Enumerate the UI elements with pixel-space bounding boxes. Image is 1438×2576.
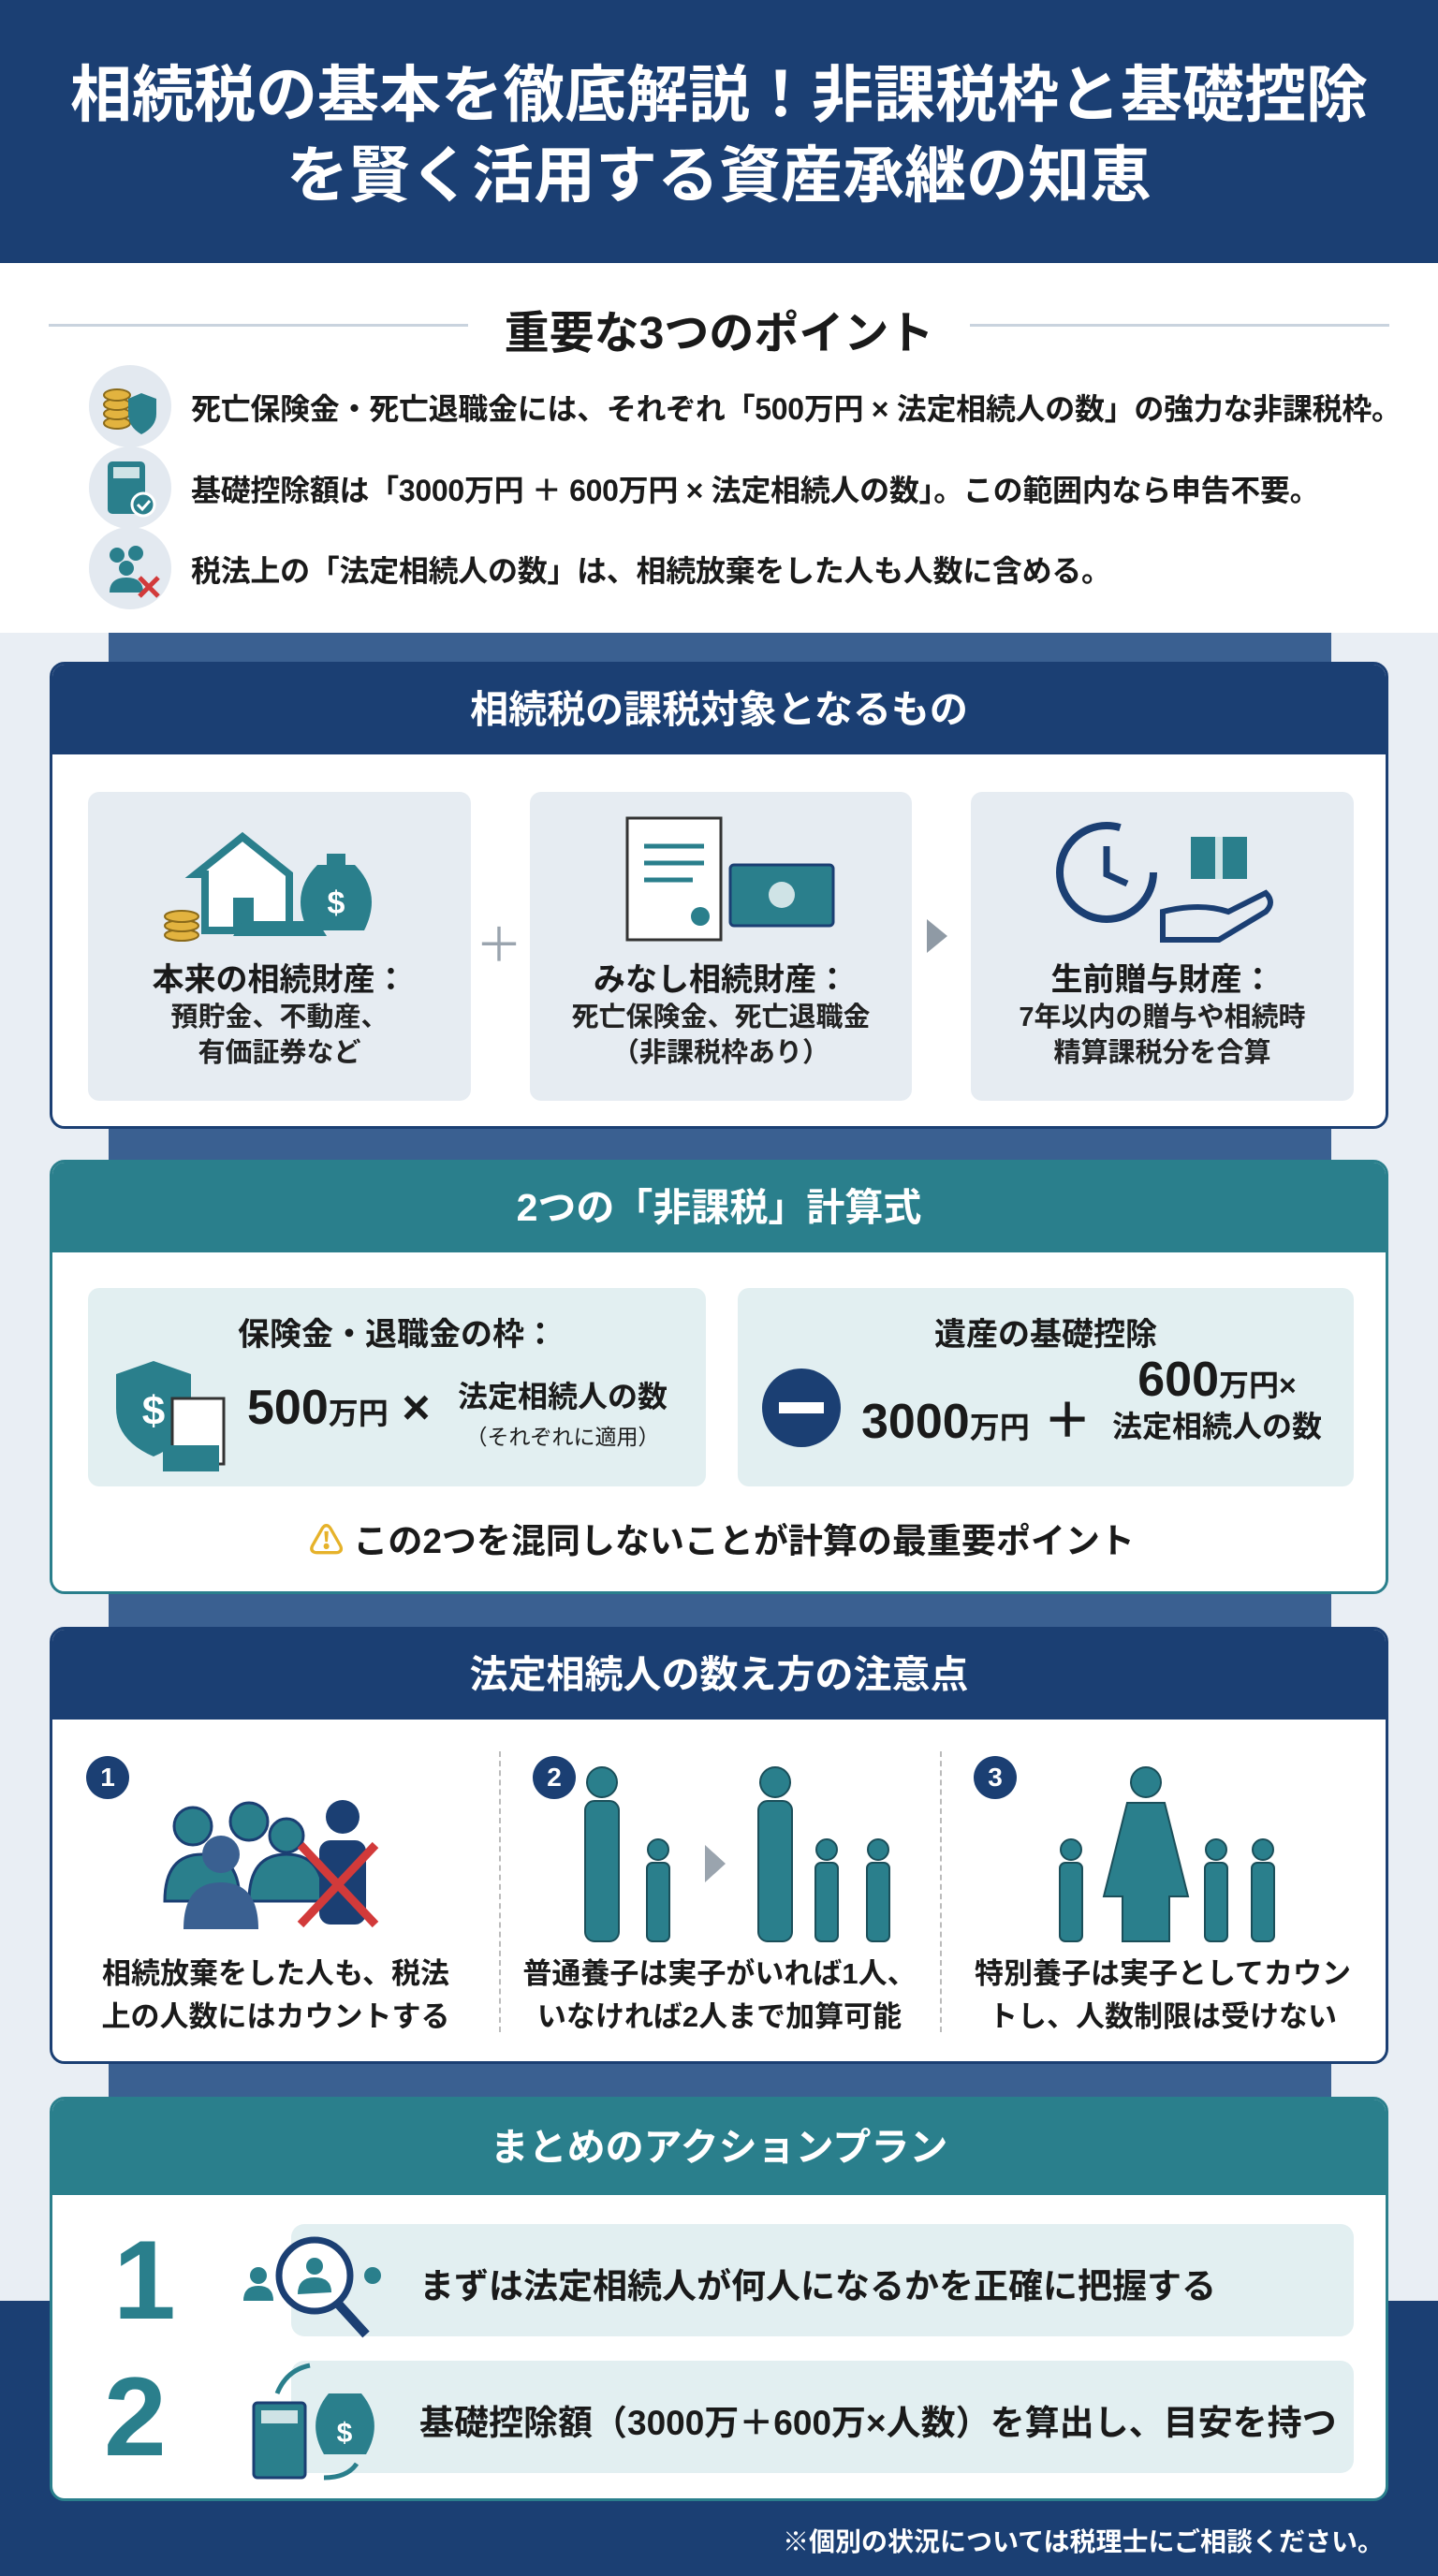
card: lifetime gifts: 7年以内の贈与や相続時	[1019, 1003, 1306, 1032]
icon: plus: ＋	[476, 919, 522, 972]
icon: minus	[762, 1368, 841, 1447]
heading	[52, 1163, 1386, 1252]
card: inherent assets: 預貯金、不動産、	[170, 1003, 388, 1032]
action 1	[113, 2217, 1354, 2343]
heading: 相続税の課税対象となるもの	[470, 688, 968, 731]
card: inherent assets: 有価証券など	[198, 1038, 361, 1068]
column 2: 2	[547, 1763, 562, 1792]
heading	[52, 2100, 1386, 2195]
bottom band	[0, 2301, 1438, 2576]
title: 相続税の基本を徹底解説！非課税枠と基礎控除	[70, 60, 1368, 129]
card: lifetime gifts	[971, 792, 1354, 1101]
card: deemed assets: みなし相続財産：	[594, 962, 848, 998]
heading: 法定相続人の数え方の注意点	[470, 1653, 968, 1696]
card: basic deduction	[738, 1288, 1354, 1486]
action 2: $	[337, 2418, 353, 2449]
card: insurance limit: （それぞれに適用）	[466, 1425, 659, 1449]
panel: counting heirs	[50, 1627, 1388, 2064]
header background	[0, 0, 1438, 263]
card: basic deduction: 法定相続人の数	[1112, 1410, 1322, 1443]
icon: calculator	[89, 446, 171, 529]
icon: coins shield	[89, 365, 171, 447]
heading: まとめのアクションプラン	[491, 2126, 947, 2169]
column 1: 相続放棄をした人も、税法	[102, 1957, 449, 1990]
card: lifetime gifts: 生前贈与財産：	[1050, 962, 1273, 998]
column 1: 1	[100, 1763, 115, 1792]
card: basic deduction: 600万円×	[1137, 1353, 1297, 1407]
card: insurance limit: 500万円 ×	[247, 1381, 431, 1435]
middle band	[109, 633, 1331, 2318]
action 2: 基礎控除額（3000万＋600万×人数）を算出し、目安を持つ	[419, 2404, 1337, 2442]
arrow	[927, 919, 947, 953]
points heading: 重要な3つのポイント	[505, 309, 933, 359]
panel: action plan	[50, 2097, 1388, 2501]
card: deemed assets: 死亡保険金、死亡退職金	[571, 1003, 871, 1032]
column 2	[522, 1756, 917, 2033]
icon: people cross	[89, 527, 171, 609]
card: insurance limit: $	[142, 1388, 165, 1434]
points section background	[0, 263, 1438, 633]
column 3: 3	[988, 1763, 1003, 1792]
title	[70, 60, 1368, 210]
point 2: 基礎控除額は「3000万円 ＋ 600万円 × 法定相続人の数」。この範囲内なら申告不要。	[191, 474, 1319, 507]
column 1: 上の人数にはカウントする	[101, 2000, 449, 2033]
card: insurance limit: 保険金・退職金の枠：	[238, 1317, 556, 1353]
column 3: 特別養子は実子としてカウン	[975, 1957, 1351, 1990]
callout: warning: ⚠ この2つを混同しないことが計算の最重要ポイント	[309, 1522, 1135, 1560]
point 2	[89, 447, 1319, 528]
card: insurance limit: 法定相続人の数	[458, 1380, 668, 1413]
column 2: 普通養子は実子がいれば1人、	[522, 1957, 917, 1990]
card: basic deduction: 3000万円 ＋	[861, 1395, 1092, 1449]
point 3: 税法上の「法定相続人の数」は、相続放棄をした人も人数に含める。	[191, 554, 1111, 588]
title: を賢く活用する資産承継の知恵	[286, 140, 1152, 210]
heading: 2つの「非課税」計算式	[517, 1186, 921, 1229]
card: lifetime gifts: 精算課税分を合算	[1053, 1038, 1271, 1068]
action 2	[104, 2354, 1354, 2481]
action 1: まずは法定相続人が何人になるかを正確に把握する	[419, 2267, 1216, 2305]
points heading	[49, 309, 1389, 359]
point 3	[89, 528, 1111, 609]
card: inherent assets: 本来の相続財産：	[152, 962, 406, 998]
card: deemed assets	[530, 792, 912, 1101]
footer note: ※個別の状況については税理士にご相談ください。	[783, 2527, 1384, 2556]
column 1	[86, 1756, 449, 2033]
column 3	[974, 1756, 1351, 2033]
action 1: 1	[113, 2217, 176, 2343]
column 3: トし、人数制限は受けない	[989, 2000, 1337, 2033]
card: inherent assets: $	[327, 886, 345, 921]
point 1: 死亡保険金・死亡退職金には、それぞれ「500万円 × 法定相続人の数」の強力な非課税枠。	[191, 392, 1401, 426]
panel: taxable assets	[50, 662, 1388, 1129]
heading	[52, 1630, 1386, 1720]
heading	[52, 665, 1386, 754]
action 2: 2	[104, 2354, 167, 2480]
column 2: いなければ2人まで加算可能	[537, 2000, 902, 2033]
card: insurance limit	[88, 1288, 706, 1486]
card: inherent assets	[88, 792, 471, 1101]
panel: non-taxable formulas	[50, 1160, 1388, 1594]
card: deemed assets: （非課税枠あり）	[612, 1038, 829, 1068]
point 1	[89, 365, 1401, 447]
card: basic deduction: 遺産の基礎控除	[934, 1317, 1157, 1353]
